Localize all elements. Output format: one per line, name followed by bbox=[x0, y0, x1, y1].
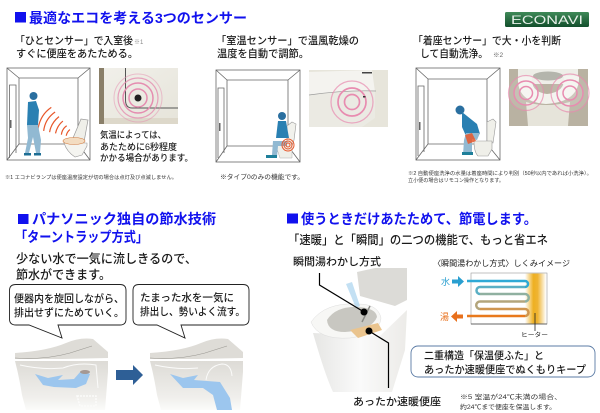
sensor 1: human sensor bbox=[5, 34, 193, 181]
coil: water pipes bbox=[467, 281, 529, 316]
arrow: next step bbox=[116, 365, 143, 385]
callout: swirl: 便器内を旋回しながら、 bbox=[14, 292, 124, 305]
text: water saving summary bbox=[16, 251, 197, 282]
diagram: instant water heater bbox=[433, 258, 570, 339]
illustration: toilet, water flushing bbox=[150, 338, 243, 410]
label: heater: ヒーター bbox=[521, 331, 548, 339]
callout: swirl: 排出せずにためていく。 bbox=[14, 306, 124, 319]
illustration: seated person bbox=[216, 70, 300, 162]
heading: human sensor: 「ひとセンサー」で入室後 bbox=[15, 34, 133, 47]
photo: room temperature sensor bbox=[309, 70, 388, 127]
heading: human sensor bbox=[15, 34, 144, 60]
heading: turn trap: パナソニック独自の節水技術 bbox=[32, 211, 216, 227]
logo: ECONAVI bbox=[505, 12, 589, 27]
title: three sensors: 最適なエコを考える3つのセンサー bbox=[29, 10, 247, 26]
footnote 3: 立小便の場合はリモコン操作となります。 bbox=[408, 177, 504, 184]
footnote 3 bbox=[408, 170, 592, 184]
heading: room temperature sensor bbox=[216, 34, 359, 60]
callout: swirl bbox=[10, 284, 126, 338]
heading: power saving: 使うときだけあたためて、節電します。 bbox=[301, 211, 537, 227]
sensor 2: room temperature sensor bbox=[216, 34, 388, 181]
heading: room temperature sensor: 温度を自動で調節。 bbox=[217, 47, 309, 60]
label: heated seat bbox=[353, 328, 442, 408]
photo: human sensor lens bbox=[99, 68, 178, 124]
illustration: person sitting down bbox=[416, 68, 500, 160]
diagram title: 〈瞬間湯わかし方式〉しくみイメージ bbox=[433, 258, 570, 268]
photo: seat sensor bbox=[508, 69, 589, 126]
heading: seat sensor: 「着座センサー」で大・小を判断 bbox=[413, 34, 561, 47]
callout: flush: 排出し、勢いよく流す。 bbox=[140, 305, 245, 318]
label: heated seat: あったか速暖便座 bbox=[353, 395, 442, 408]
footnote 1: ※1 エコナビランプは便座温度設定が切の場合は点灯及び点滅しません。 bbox=[5, 174, 177, 181]
footnote 3: ※2 自動便座洗浄の水量は着座時間により判別（50秒以内であれば小洗浄）。 bbox=[408, 170, 592, 177]
panel: power saving bbox=[287, 211, 595, 411]
text: water saving summary: 少ない水で一気に流しきるので、 bbox=[16, 251, 197, 266]
label: hot water out: 湯 bbox=[440, 312, 449, 322]
diagram box with heater bbox=[471, 273, 547, 324]
text: water saving summary: 節水ができます。 bbox=[16, 267, 111, 282]
heading: turn trap bbox=[15, 211, 216, 245]
heading: seat sensor: して自動洗浄。 bbox=[420, 47, 488, 60]
heading: room temperature sensor: 「室温センサー」で温風乾燥の bbox=[216, 34, 359, 47]
callout: double structure bbox=[411, 346, 595, 377]
illustration: toilet, water held bbox=[15, 338, 108, 410]
heading: seat sensor bbox=[413, 34, 561, 60]
logo: ECONAVI: ECONAVI bbox=[511, 15, 583, 27]
photo: toilet with heated seat bbox=[311, 268, 407, 392]
illustration: person entering room bbox=[7, 68, 90, 160]
label: instant water heater bbox=[293, 255, 382, 316]
footnote 5: ※5 室温が24℃未満の場合、 bbox=[460, 392, 562, 401]
heading: human sensor: ※1 bbox=[134, 39, 144, 46]
note: temperature caveat: あたために6秒程度 bbox=[100, 141, 177, 152]
sensor 3: seat sensor bbox=[408, 34, 592, 184]
panel: three sensors bbox=[5, 10, 592, 184]
callout: double structure: 二重構造「保温便ふた」と bbox=[424, 349, 544, 362]
footnote 2: ※タイプ0のみの機能です。 bbox=[220, 172, 304, 181]
heading: human sensor: すぐに便座をあたためる。 bbox=[16, 47, 138, 60]
note: temperature caveat: 気温によっては、 bbox=[100, 129, 166, 140]
subheading: two functions: 「速暖」と「瞬間」の二つの機能で、もっと省エネ bbox=[288, 232, 548, 247]
heading: seat sensor: ※2 bbox=[493, 52, 504, 59]
callout: flush: たまった水を一気に bbox=[140, 291, 234, 304]
footnote 5 bbox=[460, 392, 562, 411]
heading: turn trap: 「ターントラップ方式」 bbox=[15, 229, 148, 245]
panel: water saving bbox=[10, 211, 249, 410]
callout: flush bbox=[133, 284, 249, 338]
note: temperature caveat: かかる場合があります。 bbox=[100, 152, 193, 163]
label: water in: 水 bbox=[441, 276, 450, 287]
callout: double structure: あったか速暖便座でぬくもりキープ bbox=[424, 363, 586, 376]
label: instant water heater: 瞬間湯わかし方式 bbox=[293, 255, 382, 268]
note: temperature caveat bbox=[100, 129, 193, 163]
footnote 5: 約24℃まで便座を保温します。 bbox=[460, 402, 556, 411]
